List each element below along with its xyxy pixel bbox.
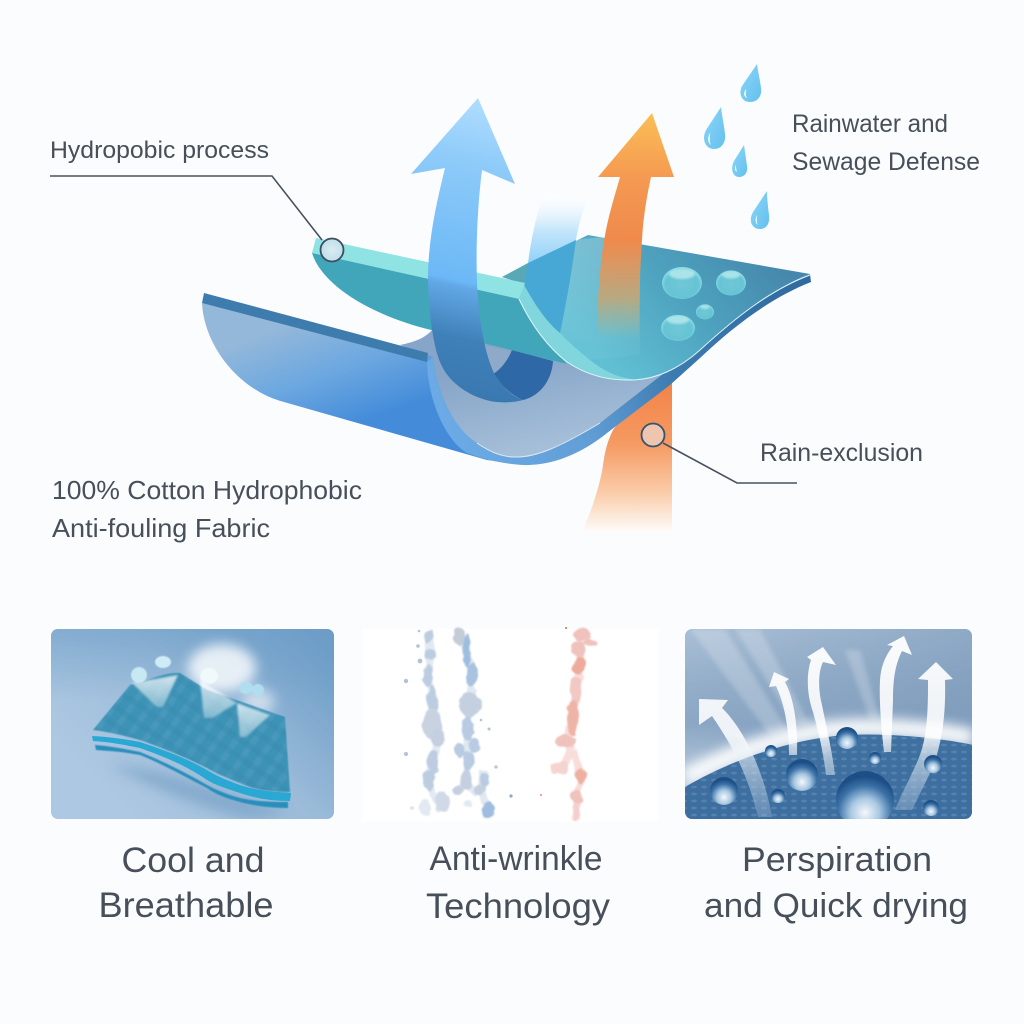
label: fabric name: Anti-fouling Fabric: [52, 513, 270, 543]
splash specks: [404, 630, 513, 810]
dark inner loop: [484, 345, 553, 400]
blue splash streak 1: [420, 629, 449, 817]
fabric sheet: [93, 673, 290, 792]
panel: perspiration and quick drying: [685, 629, 973, 829]
label: fabric name: [52, 475, 362, 543]
blue arrow: [411, 98, 523, 402]
lower blue fabric layer: [202, 274, 811, 465]
caption: anti-wrinkle technology: Technology: [426, 887, 611, 926]
drop 1: [740, 64, 761, 102]
red specks: [540, 627, 567, 796]
caption: anti-wrinkle technology: Anti-wrinkle: [430, 840, 602, 878]
fabric glow edge: [685, 728, 973, 778]
label: rainwater and sewage defense: Sewage Defense: [792, 148, 980, 176]
caption: perspiration and quick drying: and Quick drying: [704, 887, 968, 925]
vapor jets: [132, 675, 270, 737]
caption: anti-wrinkle technology: [426, 840, 611, 926]
drop 3: [732, 145, 747, 177]
marker: rain-exclusion: [642, 424, 797, 483]
infographic: [50, 64, 979, 926]
label: rain-exclusion: Rain-exclusion: [760, 439, 923, 467]
drop 2: [704, 107, 725, 149]
rising orange stem below fabric: [582, 375, 672, 532]
faded white-blue flow: [526, 193, 588, 280]
caption: perspiration and quick drying: Perspiration: [742, 841, 932, 879]
falling rain drops: [704, 64, 769, 229]
blue splash streak 2: [453, 629, 494, 818]
teal hydrophobic layer: [312, 235, 810, 380]
water droplets: [710, 727, 942, 829]
fabric soft shadow: [110, 765, 290, 819]
marker: hydrophobic process: [50, 176, 344, 262]
panel: anti-wrinkle technology: [362, 627, 658, 822]
orange arrow: [597, 113, 674, 340]
label: fabric name: 100% Cotton Hydrophobic: [52, 475, 362, 505]
drop 4: [751, 191, 769, 229]
white rising arrows: [699, 636, 953, 817]
caption: perspiration and quick drying: [704, 841, 968, 925]
water beads: [661, 267, 746, 341]
label: hydrophobic process: Hydropobic process: [50, 137, 269, 164]
panel: cool and breathable: [51, 629, 334, 819]
dome surface: [685, 735, 973, 820]
under layer: [95, 745, 288, 808]
caption: cool and breathable: [98, 841, 274, 925]
red splash streak: [551, 628, 597, 821]
light rays: [690, 629, 880, 735]
label: rainwater and sewage defense: [792, 110, 980, 176]
middle cyan layer: [92, 736, 291, 801]
fabric diagram: [50, 98, 811, 532]
caption: cool and breathable: Breathable: [98, 886, 274, 925]
mist glow: [188, 644, 274, 716]
droplets: [131, 656, 264, 696]
label: rainwater and sewage defense: Rainwater and: [792, 110, 948, 138]
caption: cool and breathable: Cool and: [122, 841, 264, 880]
